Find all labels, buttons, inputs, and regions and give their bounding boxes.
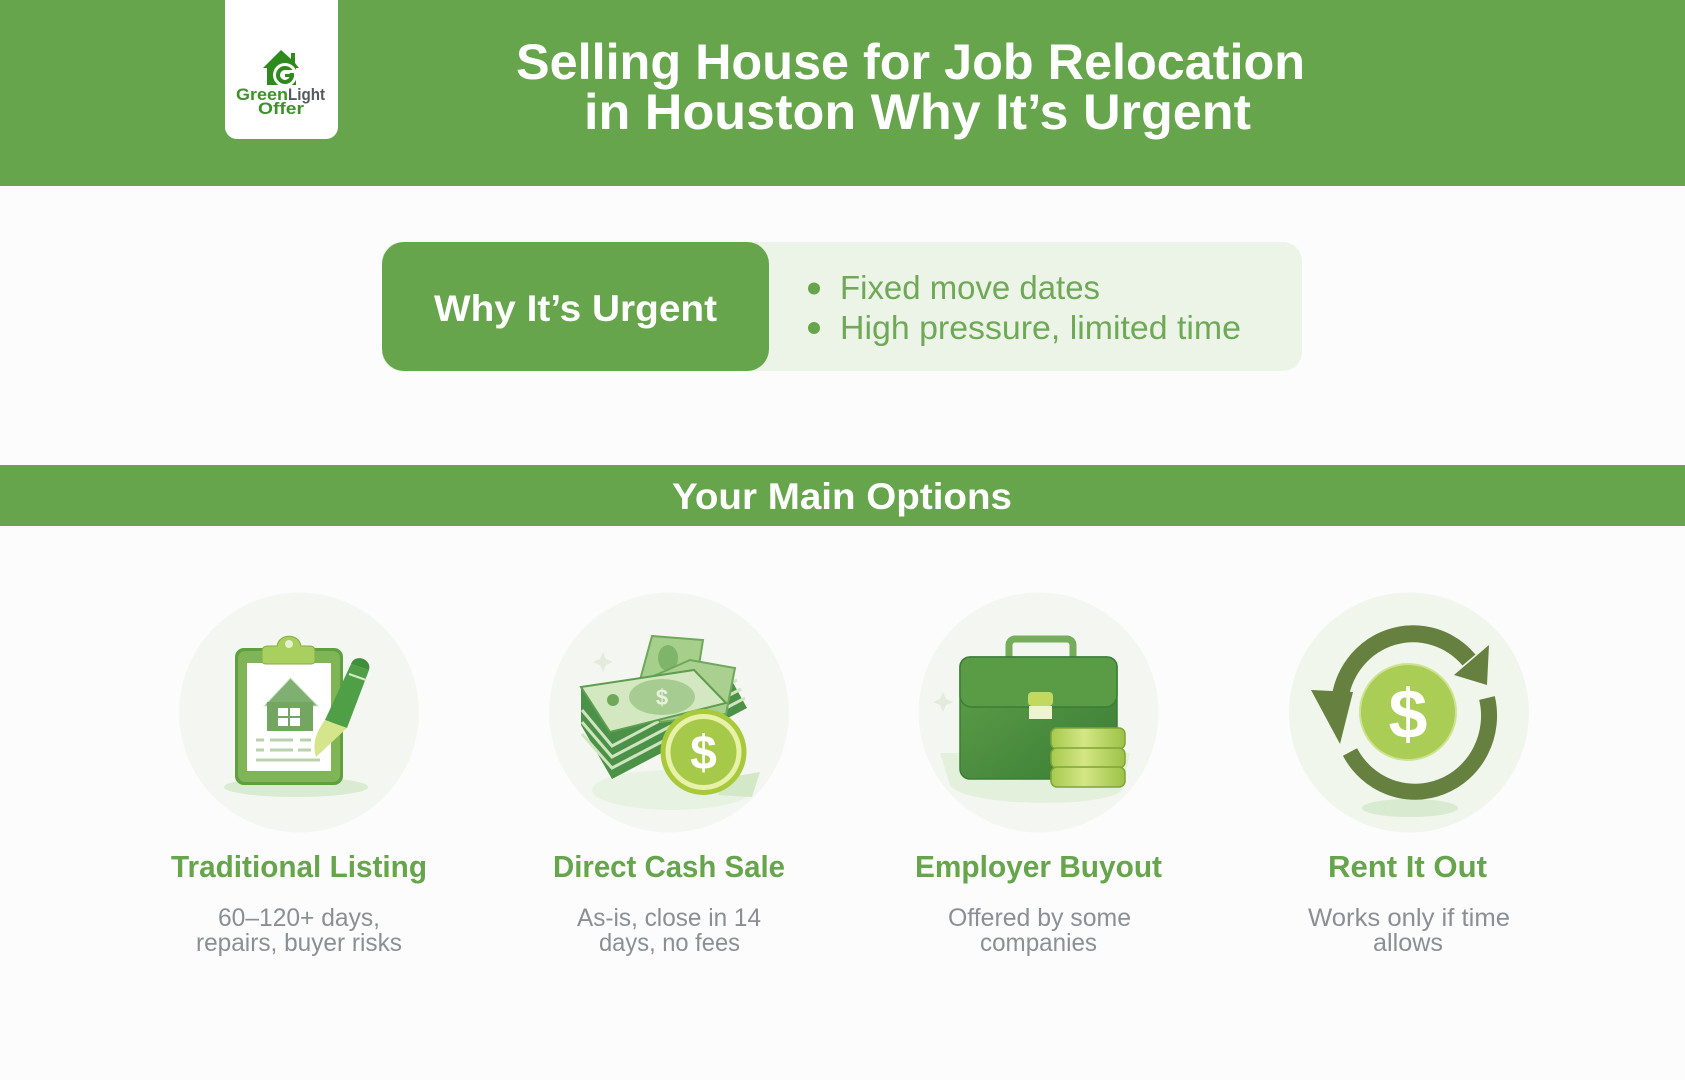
icon: cash stack and coin: $	[690, 727, 717, 780]
heading: Rent It Out	[1328, 849, 1487, 884]
section band: your main options: Your Main Options	[672, 476, 1012, 517]
description	[577, 904, 761, 957]
title: in Houston Why It’s Urgent	[584, 84, 1251, 140]
description	[196, 904, 402, 957]
logo wordmark: Green	[236, 85, 288, 104]
icon: briefcase and coins	[918, 592, 1158, 832]
description: allows	[1373, 929, 1443, 957]
bullet list: Fixed move dates	[840, 269, 1100, 306]
bullet list	[808, 269, 1241, 346]
logo card	[225, 0, 338, 139]
heading: Direct Cash Sale	[553, 849, 785, 884]
logo wordmark	[236, 85, 325, 118]
description: repairs, buyer risks	[196, 929, 402, 957]
description: companies	[980, 929, 1097, 957]
heading: why it's urgent: Why It’s Urgent	[434, 288, 717, 329]
header banner	[0, 0, 1685, 186]
description: Works only if time	[1308, 904, 1510, 932]
icon: circular arrows around dollar coin	[1289, 592, 1529, 832]
icon: cash stack and coin	[549, 592, 789, 832]
description: 60–120+ days,	[218, 904, 380, 932]
icon: circular arrows around dollar coin: $	[1389, 675, 1427, 753]
description: As-is, close in 14	[577, 904, 761, 932]
option: direct cash sale	[549, 592, 789, 957]
option: employer buyout	[915, 592, 1162, 957]
option: rent it out	[1289, 592, 1529, 957]
description: Offered by some	[948, 904, 1131, 932]
logo wordmark: Offer	[258, 99, 304, 118]
heading: Traditional Listing	[171, 849, 427, 884]
description	[1308, 904, 1510, 957]
option: traditional listing	[171, 592, 427, 957]
title	[516, 34, 1305, 140]
heading: Employer Buyout	[915, 849, 1162, 884]
section band: your main options	[0, 465, 1685, 526]
icon: clipboard with house and pen	[179, 592, 419, 832]
panel: why it's urgent	[382, 242, 1302, 371]
bullet list: High pressure, limited time	[840, 309, 1241, 346]
icon: cash stack and coin: $	[656, 685, 668, 710]
title: Selling House for Job Relocation	[516, 34, 1305, 90]
logo wordmark: Light	[288, 85, 325, 104]
icon: logo house	[263, 50, 299, 87]
description: days, no fees	[599, 929, 740, 957]
description	[948, 904, 1131, 957]
